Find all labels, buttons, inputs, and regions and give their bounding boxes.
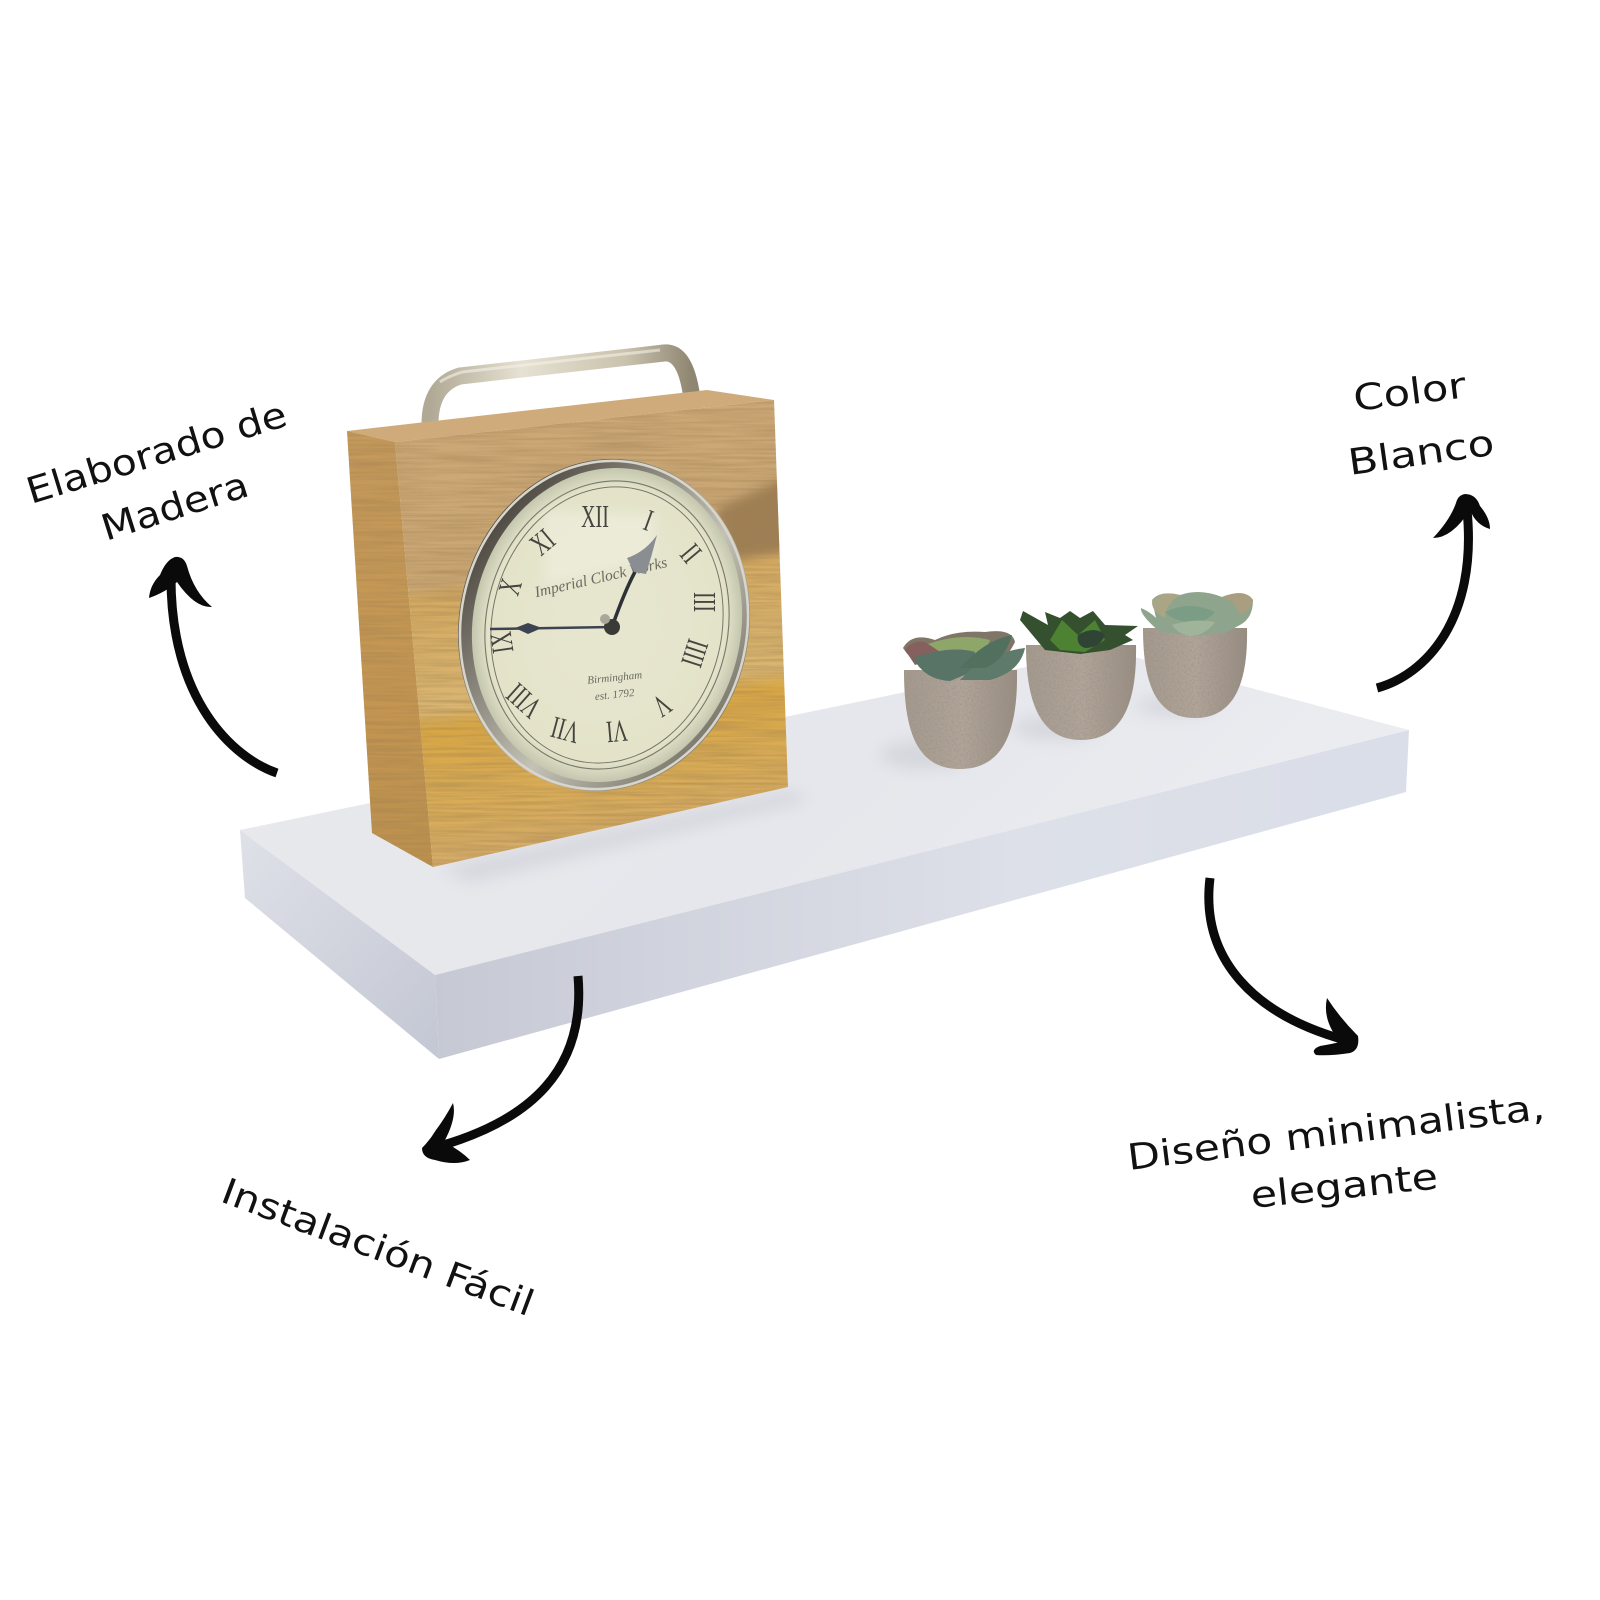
shelf top surface bbox=[240, 650, 1409, 975]
callout: Color Blanco bbox=[1346, 365, 1497, 484]
clock numerals: III bbox=[687, 592, 721, 612]
clock numerals: I bbox=[639, 503, 657, 538]
clock numerals: XI bbox=[523, 522, 562, 562]
arrow: to Instalación Fácil bbox=[422, 976, 579, 1163]
clock hands bbox=[490, 627, 612, 629]
arrow: to Elaborado de Madera bbox=[149, 557, 277, 773]
callout: Elaborado de Madera: Madera bbox=[96, 465, 254, 550]
icon: succulent pot left bbox=[900, 631, 1025, 775]
clock numerals: XII bbox=[581, 500, 609, 534]
callout: Diseño minimalista, elegante: Diseño minimalista, bbox=[1125, 1087, 1547, 1179]
clock face lettering: Imperial Clock Works bbox=[532, 554, 669, 601]
shelf left side bbox=[240, 830, 439, 1059]
callout: Diseño minimalista, elegante: elegante bbox=[1249, 1157, 1440, 1217]
clock front wood bbox=[393, 395, 793, 875]
clock top face bbox=[347, 390, 774, 442]
callout: Elaborado de Madera: Elaborado de bbox=[22, 394, 292, 513]
clock numerals: II bbox=[673, 537, 708, 570]
clock handle bbox=[430, 353, 692, 424]
callout: Elaborado de Madera bbox=[22, 394, 292, 550]
clock face: est. 1792 bbox=[594, 687, 636, 703]
callout: Color Blanco: Blanco bbox=[1346, 423, 1497, 484]
arrow: to Diseño minimalista bbox=[1209, 878, 1358, 1055]
clock numerals: VI bbox=[605, 713, 629, 749]
icon: succulent pot right bbox=[1140, 592, 1253, 727]
panel: white floating shelf bbox=[240, 650, 1409, 1059]
callout: Instalación Fácil: Instalación Fácil bbox=[216, 1171, 539, 1325]
clock numerals: V bbox=[646, 687, 678, 724]
dial glass reflection bbox=[545, 512, 655, 585]
infographic canvas bbox=[27, 344, 1542, 1316]
icon: mantel clock bbox=[340, 350, 793, 875]
icon: succulent pot middle bbox=[1020, 611, 1138, 740]
shelf front edge bbox=[435, 730, 1409, 1059]
arrow: to Color Blanco bbox=[1377, 494, 1490, 688]
clock numerals: IIII bbox=[674, 635, 715, 671]
callout: Color Blanco: Color bbox=[1351, 365, 1468, 420]
clock numerals: X bbox=[492, 575, 529, 599]
callout: Diseño minimalista, elegante bbox=[1125, 1087, 1547, 1217]
clock numerals: IX bbox=[483, 630, 521, 655]
clock face bbox=[427, 432, 781, 818]
shadows on the shelf bbox=[440, 696, 1215, 882]
clock numerals: VII bbox=[548, 710, 583, 750]
clock numerals: VIII bbox=[500, 676, 549, 725]
clock side face bbox=[347, 431, 433, 867]
clock numerals bbox=[483, 500, 721, 750]
clock face: Birmingham bbox=[587, 669, 643, 687]
